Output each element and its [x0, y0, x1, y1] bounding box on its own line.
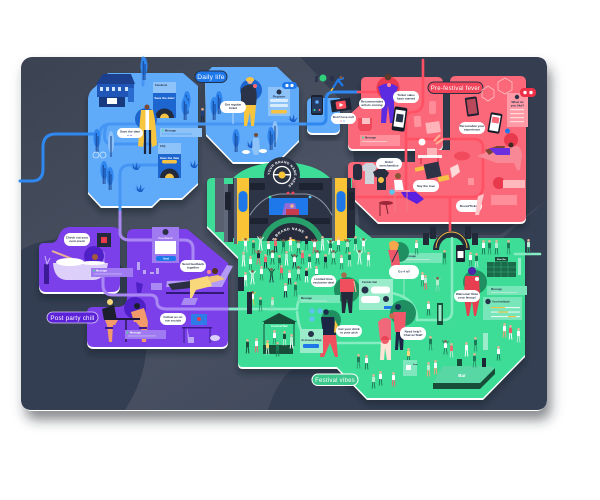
bubble: order merchandise: [376, 158, 402, 170]
crowd: [242, 236, 370, 312]
journey path: green: [230, 238, 540, 343]
card: message by bath: [91, 268, 133, 277]
illustration: central bar: Central Bar: [271, 324, 289, 328]
card: message right: Message: [491, 287, 503, 291]
journey path: coral: [357, 60, 483, 232]
figure: seated woman with phone: [379, 173, 424, 216]
card: main bar poster: Main Bar: [497, 259, 506, 261]
figures: scattered festival goers: [357, 239, 530, 388]
card: facebook post: Save the date!: [154, 96, 175, 100]
bubble: need help: Chat w/ Staff: [404, 333, 423, 337]
figures: around the bar: [246, 330, 293, 356]
illustration: banners: [437, 303, 488, 350]
icon: spotify: [315, 74, 334, 82]
bubble: don't lose out: [331, 113, 356, 124]
card: message: [160, 128, 202, 137]
bubble: personalize: experience: [464, 128, 480, 132]
bubble: get regular ticket: ticket: [229, 106, 237, 110]
card: post thread: [359, 279, 393, 310]
card: what do you like: you like?: [511, 104, 524, 108]
bubble: recommended artists: [359, 98, 385, 109]
bubble: send feedback: together: [187, 266, 200, 270]
dashboard card background: [21, 57, 547, 411]
card: FAQ and ad: FAQ: [160, 144, 165, 148]
figure: woman reclining on sofa: [166, 265, 233, 305]
figure: reclining woman on chaise: [454, 128, 522, 170]
stage: truss: [250, 194, 332, 215]
figure: cyclist: [93, 152, 106, 158]
bubble: limited time deal: exclusive deal: [313, 280, 334, 284]
card: message right: [487, 286, 527, 295]
journey path: purple: [103, 212, 238, 309]
card: message green: Message: [405, 254, 417, 258]
panel: post party upper: [39, 227, 120, 294]
illustration: tickets and posters: [415, 161, 449, 182]
bubble: welcome note: your lineup!: [458, 296, 476, 300]
icon: black speaker with red light: [97, 233, 111, 247]
phone: video call: [311, 95, 323, 115]
card: message by bath: Message: [96, 268, 108, 272]
figure: woman yellow hair: [388, 241, 409, 278]
bubble: get regular ticket: [220, 101, 246, 124]
speakers on stage front: [238, 226, 478, 314]
bubble: go 4 it: [389, 265, 419, 297]
bubble: limited time deal: [311, 275, 336, 287]
panel: daily life ticket: [205, 67, 299, 164]
bubble: get your drink: in your pick: [340, 330, 358, 334]
pill: daily life: [195, 71, 227, 82]
icon: vr goggles coral: [520, 88, 536, 97]
bubble: say the love: [413, 180, 439, 192]
illustration: hexagon icons: [482, 78, 512, 101]
card: feedback form on purple: [152, 227, 179, 263]
bubble: don't lose out: Don't lose out!: [333, 115, 354, 119]
card: your feedback: Your feedback: [492, 300, 510, 304]
card: message near stage: [298, 295, 340, 303]
bubble: check out next event: [64, 233, 90, 246]
card: in-house map: [300, 329, 323, 353]
card: feedback form on purple: Feedback: [158, 236, 173, 240]
stage: [215, 157, 355, 244]
card: FAQ and ad: Save the date: [160, 156, 180, 160]
figure: person with dogs: [242, 133, 267, 155]
bubble: recommended artists: artists coming: [361, 103, 383, 107]
gate arch: [433, 231, 470, 250]
bubble: welcome note: [454, 290, 480, 302]
bubble: recommended artists: Recommended: [361, 100, 383, 104]
bubble: get your drink: Get your drink: [338, 327, 360, 331]
card: your feedback: [483, 297, 522, 320]
card: main bar poster: [487, 257, 521, 277]
pill: pre-festival fever: Pre-festival fever: [431, 86, 480, 92]
bubble: follow us: Follow us on: [164, 315, 183, 319]
bubble: personalize: Personalize your: [460, 124, 485, 128]
card: facebook post: [153, 82, 176, 118]
panel: mobile: [307, 98, 340, 135]
phone: qr ticket: [391, 106, 408, 132]
card: video player: [330, 98, 352, 112]
bubble: need help: Need help?: [405, 330, 421, 334]
figure: woman in yellow coat: [135, 104, 157, 154]
bubble: send feedback: [180, 260, 206, 272]
illustration: DJ podium: Bar: [458, 373, 466, 378]
bubble: say the love: Say the love: [417, 184, 435, 188]
figure: runner: [331, 76, 344, 91]
card: message: Message: [165, 128, 177, 132]
bubble: welcome note: Welcome! Note: [456, 292, 478, 296]
card: message green: [400, 253, 442, 263]
panel: post party lower: [87, 229, 228, 349]
card: register: Register: [273, 94, 286, 98]
bubble: order merchandise: merchandise: [379, 164, 399, 168]
bubble: ticket sales: have started: [397, 96, 415, 100]
phone: qr code kiosk: [456, 245, 465, 262]
figure: woman purple hair: [463, 267, 487, 316]
green ground under the crowd: [238, 241, 360, 300]
pill: post party chill: [47, 312, 98, 323]
bubble: ticket sales: [393, 91, 419, 103]
bubble: save the date: Save the date: [120, 130, 140, 134]
figures: two women centre: [378, 300, 416, 360]
figure: woman with coral trousers: [309, 308, 341, 357]
stage: top logo: YOUR BRAND NAME HERE: [268, 160, 296, 188]
illustration: house: [96, 74, 135, 107]
journey path: blue: [20, 58, 358, 225]
phone: mixed screen: [487, 112, 503, 134]
card: post thread: Central chat: [362, 280, 377, 284]
bubble: follow us: our socials: [165, 318, 181, 322]
bubble: personalize: [459, 122, 485, 134]
illustration: desk with monitor: [182, 314, 220, 343]
card: what do you like: [507, 93, 528, 127]
stage: speaker rows: [225, 183, 354, 224]
card: feedback form on purple: Send: [163, 258, 169, 260]
figures: two women at table: [102, 297, 148, 342]
illustration: DJ podium: [433, 353, 495, 389]
card: what do you like: What do: [511, 100, 524, 104]
bubble: boost ticket: [456, 200, 482, 212]
illustration: drinks and decor: [136, 262, 162, 293]
bubble: need help: [400, 327, 426, 340]
card: message on coral: Message: [365, 136, 377, 140]
pill: pre-festival fever: [428, 82, 483, 94]
bubble: send feedback: Send feedback: [182, 262, 204, 266]
illustration: trees: [93, 57, 298, 192]
illustration: merchandise: [353, 163, 389, 190]
figure: woman in bathtub: [44, 246, 108, 284]
figure: walking person on path: [201, 108, 204, 122]
illustration: tent with qr: Scan: [413, 364, 419, 366]
card: message at table: [125, 330, 166, 339]
card: facebook post: Facebook: [155, 83, 168, 87]
bubble: check out next event: next event: [69, 239, 85, 243]
pill: festival vibes: [312, 374, 358, 386]
illustration: central bar: [262, 313, 297, 354]
bubble: ticket sales: Ticket sales: [397, 93, 415, 97]
illustration: posters: [414, 101, 441, 134]
bubble: get regular ticket: Get regular: [225, 102, 242, 106]
card: message near stage: Message: [301, 296, 313, 300]
card: register: [268, 87, 290, 116]
bubble: go 4 it: Go 4 it!!: [398, 270, 410, 274]
panel: festival vibes: [207, 162, 525, 400]
bubble: order merchandise: Order: [385, 160, 394, 164]
bubble: check out next event: Check out your: [66, 236, 89, 240]
illustration: tent with qr: [403, 360, 419, 376]
bubble: follow us: [160, 313, 186, 325]
stage: blue screen with DJ: [269, 192, 311, 215]
bubble: get your drink: [336, 325, 362, 337]
card: message on coral: [360, 135, 400, 146]
bubble: save the date: [117, 128, 143, 138]
card: FAQ and ad: [158, 143, 181, 178]
stage: lower arch logo: YOUR BRAND NAME: [271, 227, 304, 241]
icon: vr goggles: [282, 82, 297, 89]
panel: daily life main: [88, 73, 198, 208]
bubble: boost ticket: Boost/Ticket: [460, 204, 478, 208]
pill: festival vibes: Festival vibes: [315, 378, 355, 384]
figure: man in coral shirt: [334, 272, 360, 313]
figure: man with phone: [240, 77, 262, 126]
phone: artist on coral: [465, 96, 479, 117]
bubble: limited time deal: Limited time: [314, 277, 333, 281]
card: in-house map: In-house Map: [302, 338, 322, 342]
stage: led screens in towers: [238, 191, 346, 212]
pill: post party chill: Post party chill: [50, 315, 95, 322]
pill: daily life: Daily life: [197, 74, 225, 81]
figure: woman in purple: [376, 74, 400, 123]
card: message at table: Message: [130, 330, 142, 334]
illustration: armchair: [358, 118, 372, 131]
panel: pre-festival fever: [348, 76, 526, 224]
illustration: table with plant: [418, 135, 443, 164]
illustration: coral lounge decor: [450, 164, 525, 215]
